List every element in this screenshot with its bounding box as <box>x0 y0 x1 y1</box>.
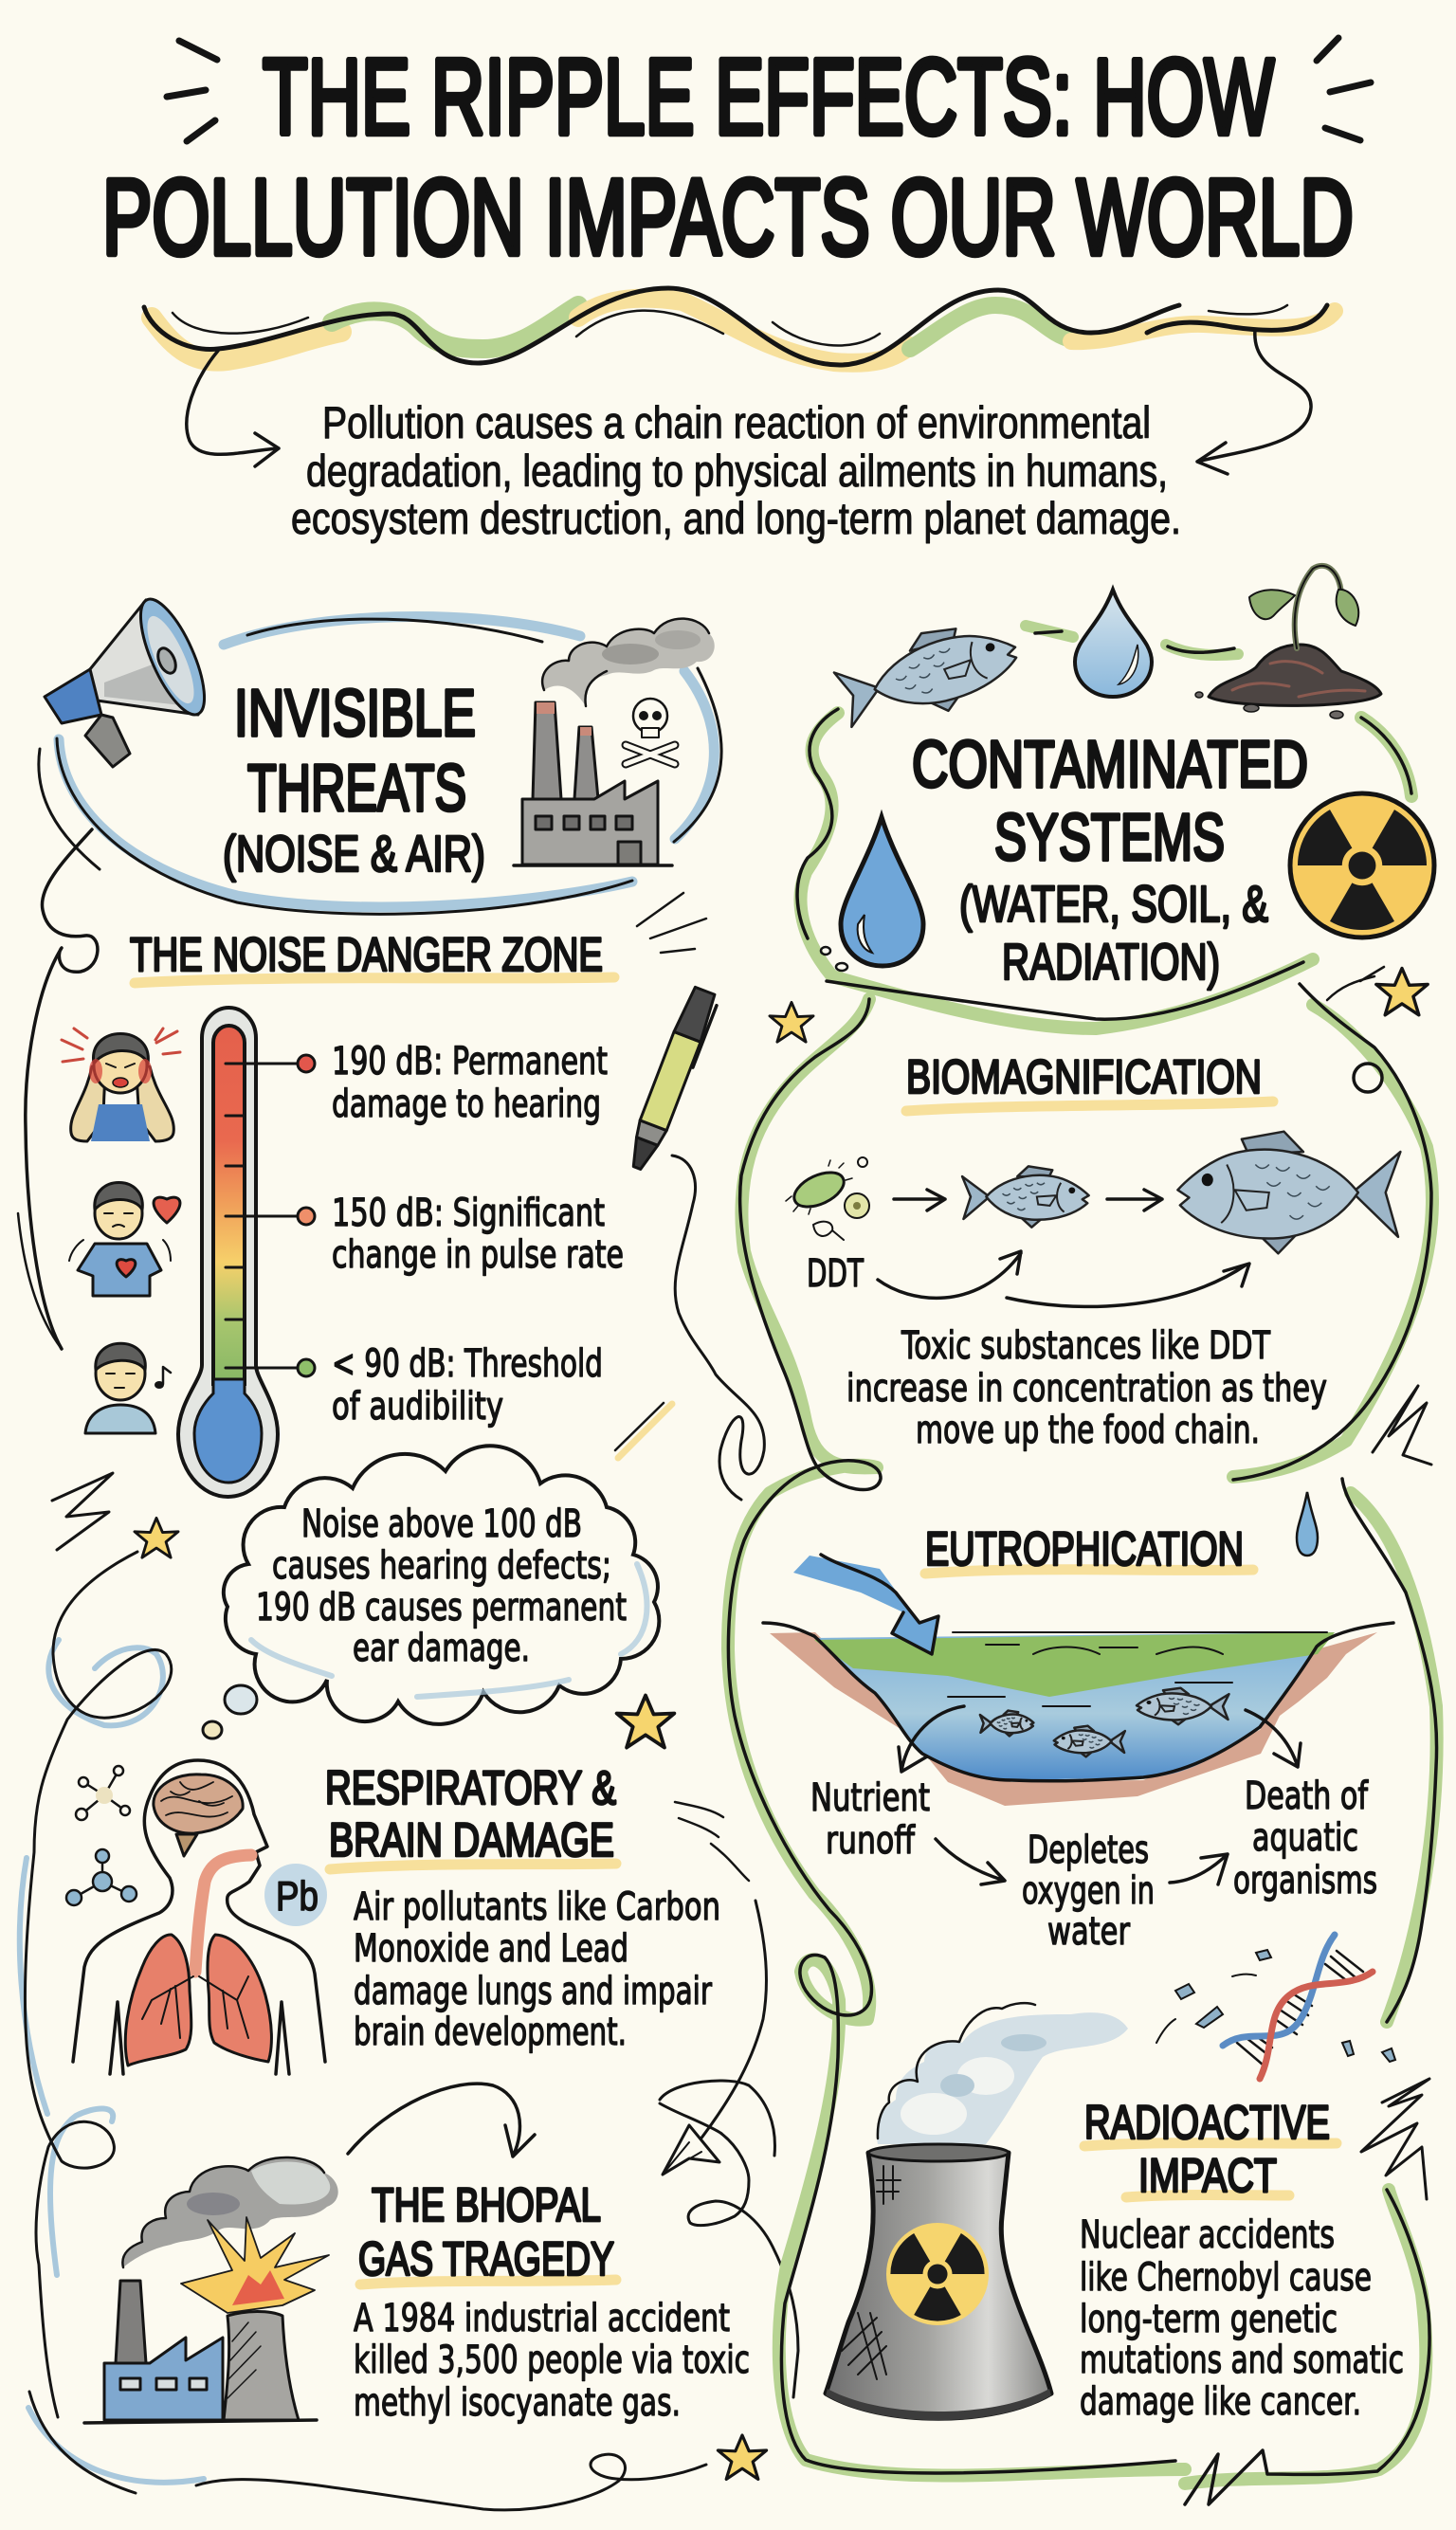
text: noise levels: 150 dB: Significant <box>332 1192 605 1235</box>
heading: the bhopal gas tragedy <box>358 2178 616 2285</box>
ripple wave divider <box>144 288 1335 365</box>
heading: respiratory and brain damage: BRAIN DAMAGE <box>329 1813 614 1866</box>
icon: nuclear cooling tower <box>826 2144 1051 2420</box>
algae surface <box>814 1632 1335 1697</box>
text: noise levels: of audibility <box>332 1385 503 1429</box>
intro text <box>291 397 1181 543</box>
arrow: runoff to oxygen depletion <box>936 1839 1005 1884</box>
label: nutrient runoff: Nutrient <box>810 1776 930 1820</box>
brain <box>154 1775 243 1856</box>
panel: contaminated systems <box>728 566 1437 2504</box>
text: noise levels: change in pulse rate <box>332 1233 624 1277</box>
text: respiratory body: damage lungs and impair <box>354 1970 712 2013</box>
icon: small drop <box>1297 1492 1318 1556</box>
icon: damaged DNA <box>1156 1935 1395 2079</box>
icon: title emphasis marks <box>167 38 1371 141</box>
icon: water drop top <box>1075 590 1152 697</box>
icon: stars <box>135 969 1428 2479</box>
heading: radioactive impact <box>1084 2096 1337 2202</box>
icon: person with raised pulse <box>69 1183 180 1296</box>
text: respiratory body: Air pollutants like Carbon <box>354 1885 720 1929</box>
heading: contaminated systems: CONTAMINATED <box>912 727 1308 801</box>
decorative scribbles: middle of page <box>615 893 798 2397</box>
heading: eutrophication: EUTROPHICATION <box>925 1522 1244 1575</box>
label: death of aquatic organisms: organisms <box>1233 1859 1377 1902</box>
arrow: DDT to large fish <box>1007 1264 1249 1306</box>
icon: microorganisms <box>786 1157 869 1240</box>
soil banks <box>770 1632 1377 1806</box>
icon: head with brain and lungs <box>73 1760 325 2074</box>
heading: the noise danger zone: THE NOISE DANGER ZONE <box>130 928 603 981</box>
arrow: oxygen depletion to death <box>1170 1854 1228 1884</box>
heading: the bhopal gas tragedy: THE BHOPAL <box>372 2178 601 2231</box>
arrow: pond to nutrient runoff <box>899 1706 964 1772</box>
icon: megaphone <box>45 592 217 767</box>
text: noise levels: 190 dB: Permanent <box>332 1040 608 1083</box>
icon: lead element badge: Pb <box>276 1873 318 1920</box>
icon: large fish <box>1177 1132 1400 1253</box>
label: depletes oxygen: oxygen in <box>1022 1869 1155 1913</box>
arrow: wave to intro right <box>1197 330 1311 474</box>
icon: lead element badge <box>264 1864 327 1926</box>
callout: noise cloud: ear damage. <box>353 1627 530 1670</box>
chart: noise thermometer <box>178 1008 315 1497</box>
heading: respiratory and brain damage: RESPIRATORY & <box>325 1761 616 1814</box>
icon: pen <box>624 986 720 1174</box>
arrow: small fish to large fish <box>1107 1190 1162 1210</box>
heading: contaminated systems: (WATER, SOIL, & <box>959 876 1268 933</box>
label: depletes oxygen: water <box>1047 1910 1130 1954</box>
water <box>814 1632 1335 1780</box>
marker: under 90 dB <box>226 1359 315 1376</box>
heading: radioactive impact: RADIOACTIVE <box>1084 2096 1330 2149</box>
label: nutrient runoff <box>810 1776 930 1863</box>
chart: eutrophication pond <box>763 1555 1393 1954</box>
title <box>102 37 1354 277</box>
text: radioactive body: Nuclear accidents <box>1080 2213 1335 2257</box>
text: respiratory body <box>354 1885 720 2054</box>
icon: water drop left <box>821 817 923 971</box>
icon: fish <box>830 610 1027 738</box>
panel: invisible threats <box>39 592 750 2425</box>
text: respiratory body: Monoxide and Lead <box>354 1927 628 1971</box>
icon: calm person with music note <box>85 1343 171 1433</box>
heading: invisible threats <box>223 676 485 883</box>
icon: inflow arrow <box>793 1556 938 1654</box>
text: biomagnification body: move up the food chain. <box>916 1409 1260 1452</box>
text: biomagnification body <box>846 1324 1327 1452</box>
label: depletes oxygen: Depletes <box>1028 1829 1149 1872</box>
callout: noise cloud <box>203 1446 659 1738</box>
chart: biomagnification food chain <box>786 1132 1400 1306</box>
arrow: to bhopal heading <box>348 2084 535 2157</box>
label: death of aquatic organisms: Death of <box>1245 1775 1369 1818</box>
label: nutrient runoff: runoff <box>826 1819 916 1863</box>
icon: molecules <box>66 1766 136 1905</box>
label: death of aquatic organisms: aquatic <box>1252 1816 1358 1860</box>
text: noise levels <box>332 1040 624 1429</box>
icon: person in pain covering ears <box>62 1028 180 1141</box>
label: DDT: DDT <box>807 1252 864 1296</box>
heading: respiratory and brain damage <box>325 1761 616 1869</box>
label: depletes oxygen <box>1022 1829 1155 1954</box>
decorative connector: left margin flow <box>18 829 706 2510</box>
heading: invisible threats: (NOISE & AIR) <box>223 826 485 883</box>
arrow: wave to intro left <box>187 351 279 466</box>
arrow: DDT to small fish <box>878 1251 1021 1298</box>
heading: contaminated systems: RADIATION) <box>1002 934 1220 991</box>
icon: factory with smoke and skull <box>514 619 715 865</box>
text: bhopal body: killed 3,500 people via toxic <box>354 2339 750 2382</box>
heading: invisible threats: INVISIBLE <box>234 676 476 750</box>
arrow: microorganisms to small fish <box>894 1190 945 1210</box>
heading: contaminated systems <box>912 727 1308 991</box>
icon: small fish <box>962 1166 1089 1228</box>
label: death of aquatic organisms <box>1233 1775 1377 1902</box>
lungs <box>125 1935 271 2066</box>
text: radioactive body: long-term genetic <box>1080 2298 1338 2341</box>
icon: cooling tower smoke <box>877 2003 1128 2144</box>
heading: invisible threats: THREATS <box>247 751 466 825</box>
text: noise levels: < 90 dB: Threshold <box>332 1342 603 1386</box>
text: radioactive body <box>1080 2213 1404 2424</box>
intro text: degradation, leading to physical ailments in humans, <box>306 446 1168 496</box>
text: respiratory body: brain development. <box>354 2011 627 2054</box>
text: noise levels: damage to hearing <box>332 1083 601 1126</box>
marker: 150 dB <box>226 1208 315 1225</box>
heading: biomagnification: BIOMAGNIFICATION <box>906 1050 1262 1103</box>
text: bhopal body <box>354 2297 750 2425</box>
intro text: Pollution causes a chain reaction of environmental <box>322 397 1151 447</box>
heading frame swoosh <box>39 616 721 914</box>
text: bhopal body: methyl isocyanate gas. <box>354 2381 681 2425</box>
callout: noise cloud: causes hearing defects; <box>272 1544 611 1588</box>
callout: noise cloud: 190 dB causes permanent <box>256 1586 627 1629</box>
arrow: pond to death of organisms <box>1246 1710 1301 1767</box>
decorative scribble: right of radioactive impact <box>1361 2079 1429 2199</box>
intro text: ecosystem destruction, and long-term planet damage. <box>291 493 1181 543</box>
callout: noise cloud: Noise above 100 dB <box>301 1502 582 1546</box>
marker: 190 dB <box>226 1055 315 1072</box>
heading: contaminated systems: SYSTEMS <box>994 800 1225 874</box>
icon: wilting plant in soil <box>1026 566 1381 719</box>
icon: factory explosion <box>84 2157 338 2423</box>
icon: radiation symbol <box>1290 793 1434 937</box>
icon: pond fish <box>980 1688 1228 1756</box>
heading: radioactive impact: IMPACT <box>1138 2149 1277 2202</box>
text: radioactive body: damage like cancer. <box>1080 2380 1361 2424</box>
airway <box>195 1855 251 1972</box>
text: biomagnification body: Toxic substances like DDT <box>901 1324 1270 1368</box>
frame: green outline flow <box>728 709 1437 2504</box>
heading: the bhopal gas tragedy: GAS TRAGEDY <box>358 2232 614 2285</box>
text: bhopal body: A 1984 industrial accident <box>354 2297 730 2340</box>
